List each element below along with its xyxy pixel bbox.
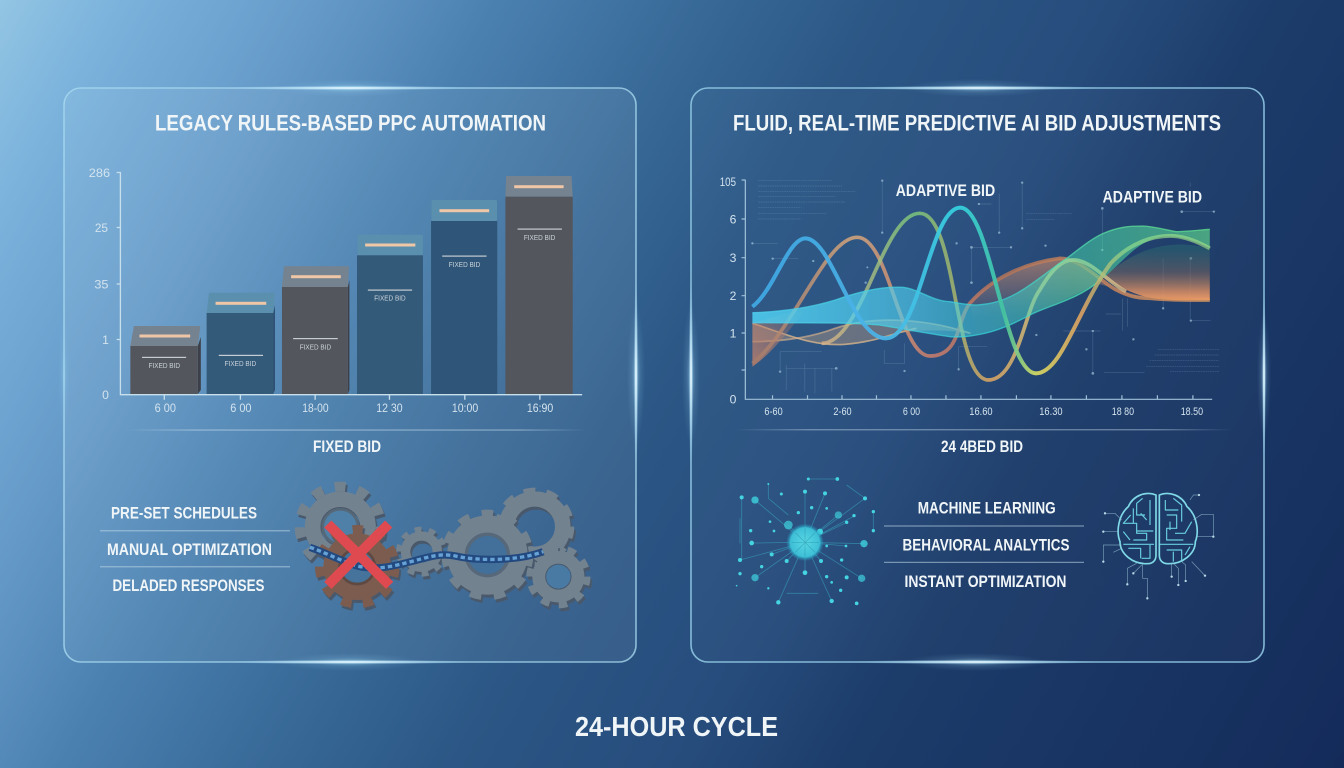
y axis labels: 286 (89, 166, 110, 180)
y axis labels: 6 (730, 213, 737, 226)
icon: circuit brain (1102, 493, 1214, 599)
network glow nodes (751, 496, 868, 582)
x axis labels: 12 30 (376, 401, 403, 415)
y axis labels: 1 (730, 327, 737, 340)
curve: orange (752, 237, 1210, 363)
icon: neural network (736, 477, 875, 605)
y axis labels: 105 (720, 175, 736, 189)
x axis labels: 6 00 (155, 401, 176, 415)
x axis labels (155, 401, 554, 415)
gear: small right (530, 549, 587, 605)
bar 5 (431, 200, 497, 394)
heading: fluid AI: FLUID, REAL-TIME PREDICTIVE AI BID ADJUSTMENTS (733, 110, 1221, 136)
footer title: 24-hour cycle: 24-HOUR CYCLE (575, 711, 778, 742)
bar 3 (282, 266, 349, 394)
x axis labels: 2-60 (833, 406, 852, 418)
bar 6 (505, 176, 573, 394)
x axis labels: 10:00 (452, 401, 478, 415)
list: legacy drawbacks (100, 504, 290, 595)
icon: broken chained gears with red cross (300, 487, 587, 605)
brain circuits (1123, 498, 1193, 562)
panel: predictive AI bid adjustments (682, 79, 1271, 671)
x axis labels: 16.60 (969, 406, 993, 418)
curve: green to yellow (822, 213, 1126, 380)
x axis labels: 16:90 (527, 401, 554, 415)
y axis labels: 3 (730, 251, 737, 265)
faint data annotations (751, 179, 1219, 393)
y axis labels (89, 166, 110, 402)
network nodes (736, 477, 875, 605)
list: legacy drawbacks: PRE-SET SCHEDULES (111, 504, 257, 522)
curve: blue to cyan (752, 208, 1210, 373)
x axis labels: 6-60 (764, 406, 783, 418)
callout: adaptive bid 1: ADAPTIVE BID (896, 181, 995, 200)
y axis labels: 25 (95, 221, 108, 235)
axis title: 24-hour bid: 24 4BED BID (941, 437, 1023, 456)
bar 2: FIXED BID (225, 361, 256, 368)
line chart: adaptive bids (720, 175, 1219, 418)
x axis labels: 18-00 (302, 401, 329, 415)
list: AI capabilities: INSTANT OPTIMIZATION (904, 573, 1066, 591)
icon: red cross (328, 524, 390, 585)
callout: adaptive bid 2: ADAPTIVE BID (1103, 188, 1202, 206)
list: AI capabilities (884, 500, 1084, 591)
x axis labels: 16.30 (1039, 406, 1063, 418)
gear: brown seized (320, 530, 394, 603)
ribbon: right orange fill (1103, 245, 1210, 300)
chart axes (117, 172, 582, 400)
network links (740, 479, 873, 602)
gear: large center (446, 514, 529, 596)
list: AI capabilities: BEHAVIORAL ANALYTICS (902, 536, 1070, 554)
chart axes (742, 180, 1212, 399)
bar 6: FIXED BID (524, 235, 555, 242)
gear: back right (499, 492, 570, 562)
y axis labels: 0 (102, 388, 109, 402)
ribbon edges (752, 226, 1210, 337)
gear: small middle (399, 530, 444, 574)
ribbon: orange band (970, 258, 1150, 335)
chain (310, 547, 543, 568)
brain leads (1103, 495, 1213, 598)
bar 4: FIXED BID (374, 296, 406, 302)
heading: legacy: LEGACY RULES-BASED PPC AUTOMATION (155, 110, 546, 136)
y axis labels: 1 (102, 333, 109, 347)
list: legacy drawbacks: MANUAL OPTIMIZATION (107, 541, 272, 559)
bar 1 (130, 326, 201, 394)
bar chart: fixed bids (89, 166, 582, 415)
bar 3: FIXED BID (300, 345, 331, 351)
ribbon: tan band (752, 320, 970, 345)
network hub (786, 524, 824, 561)
x axis labels (764, 406, 1203, 418)
x axis labels: 6 00 (903, 406, 920, 418)
ribbon: left tan wedge (752, 307, 808, 367)
list: legacy drawbacks: DELADED RESPONSES (112, 577, 264, 595)
x axis labels: 6 00 (230, 401, 252, 415)
y axis labels (720, 175, 737, 406)
bar 2 (207, 293, 275, 394)
bar 4 (357, 235, 423, 394)
y axis labels: 35 (94, 278, 109, 291)
x axis labels: 18.50 (1181, 406, 1203, 418)
y axis labels: 0 (730, 393, 737, 406)
ribbon: cyan to green band (752, 226, 1210, 337)
axis title: fixed bid: FIXED BID (313, 437, 381, 456)
gear: top left (300, 487, 381, 567)
list: AI capabilities: MACHINE LEARNING (918, 500, 1056, 518)
panel: legacy rules-based automation (58, 79, 645, 671)
bar 5: FIXED BID (449, 262, 480, 269)
bar 1: FIXED BID (149, 363, 180, 370)
x axis labels: 18 80 (1112, 406, 1134, 418)
brain outline (1118, 493, 1197, 564)
y axis labels: 2 (730, 289, 737, 303)
